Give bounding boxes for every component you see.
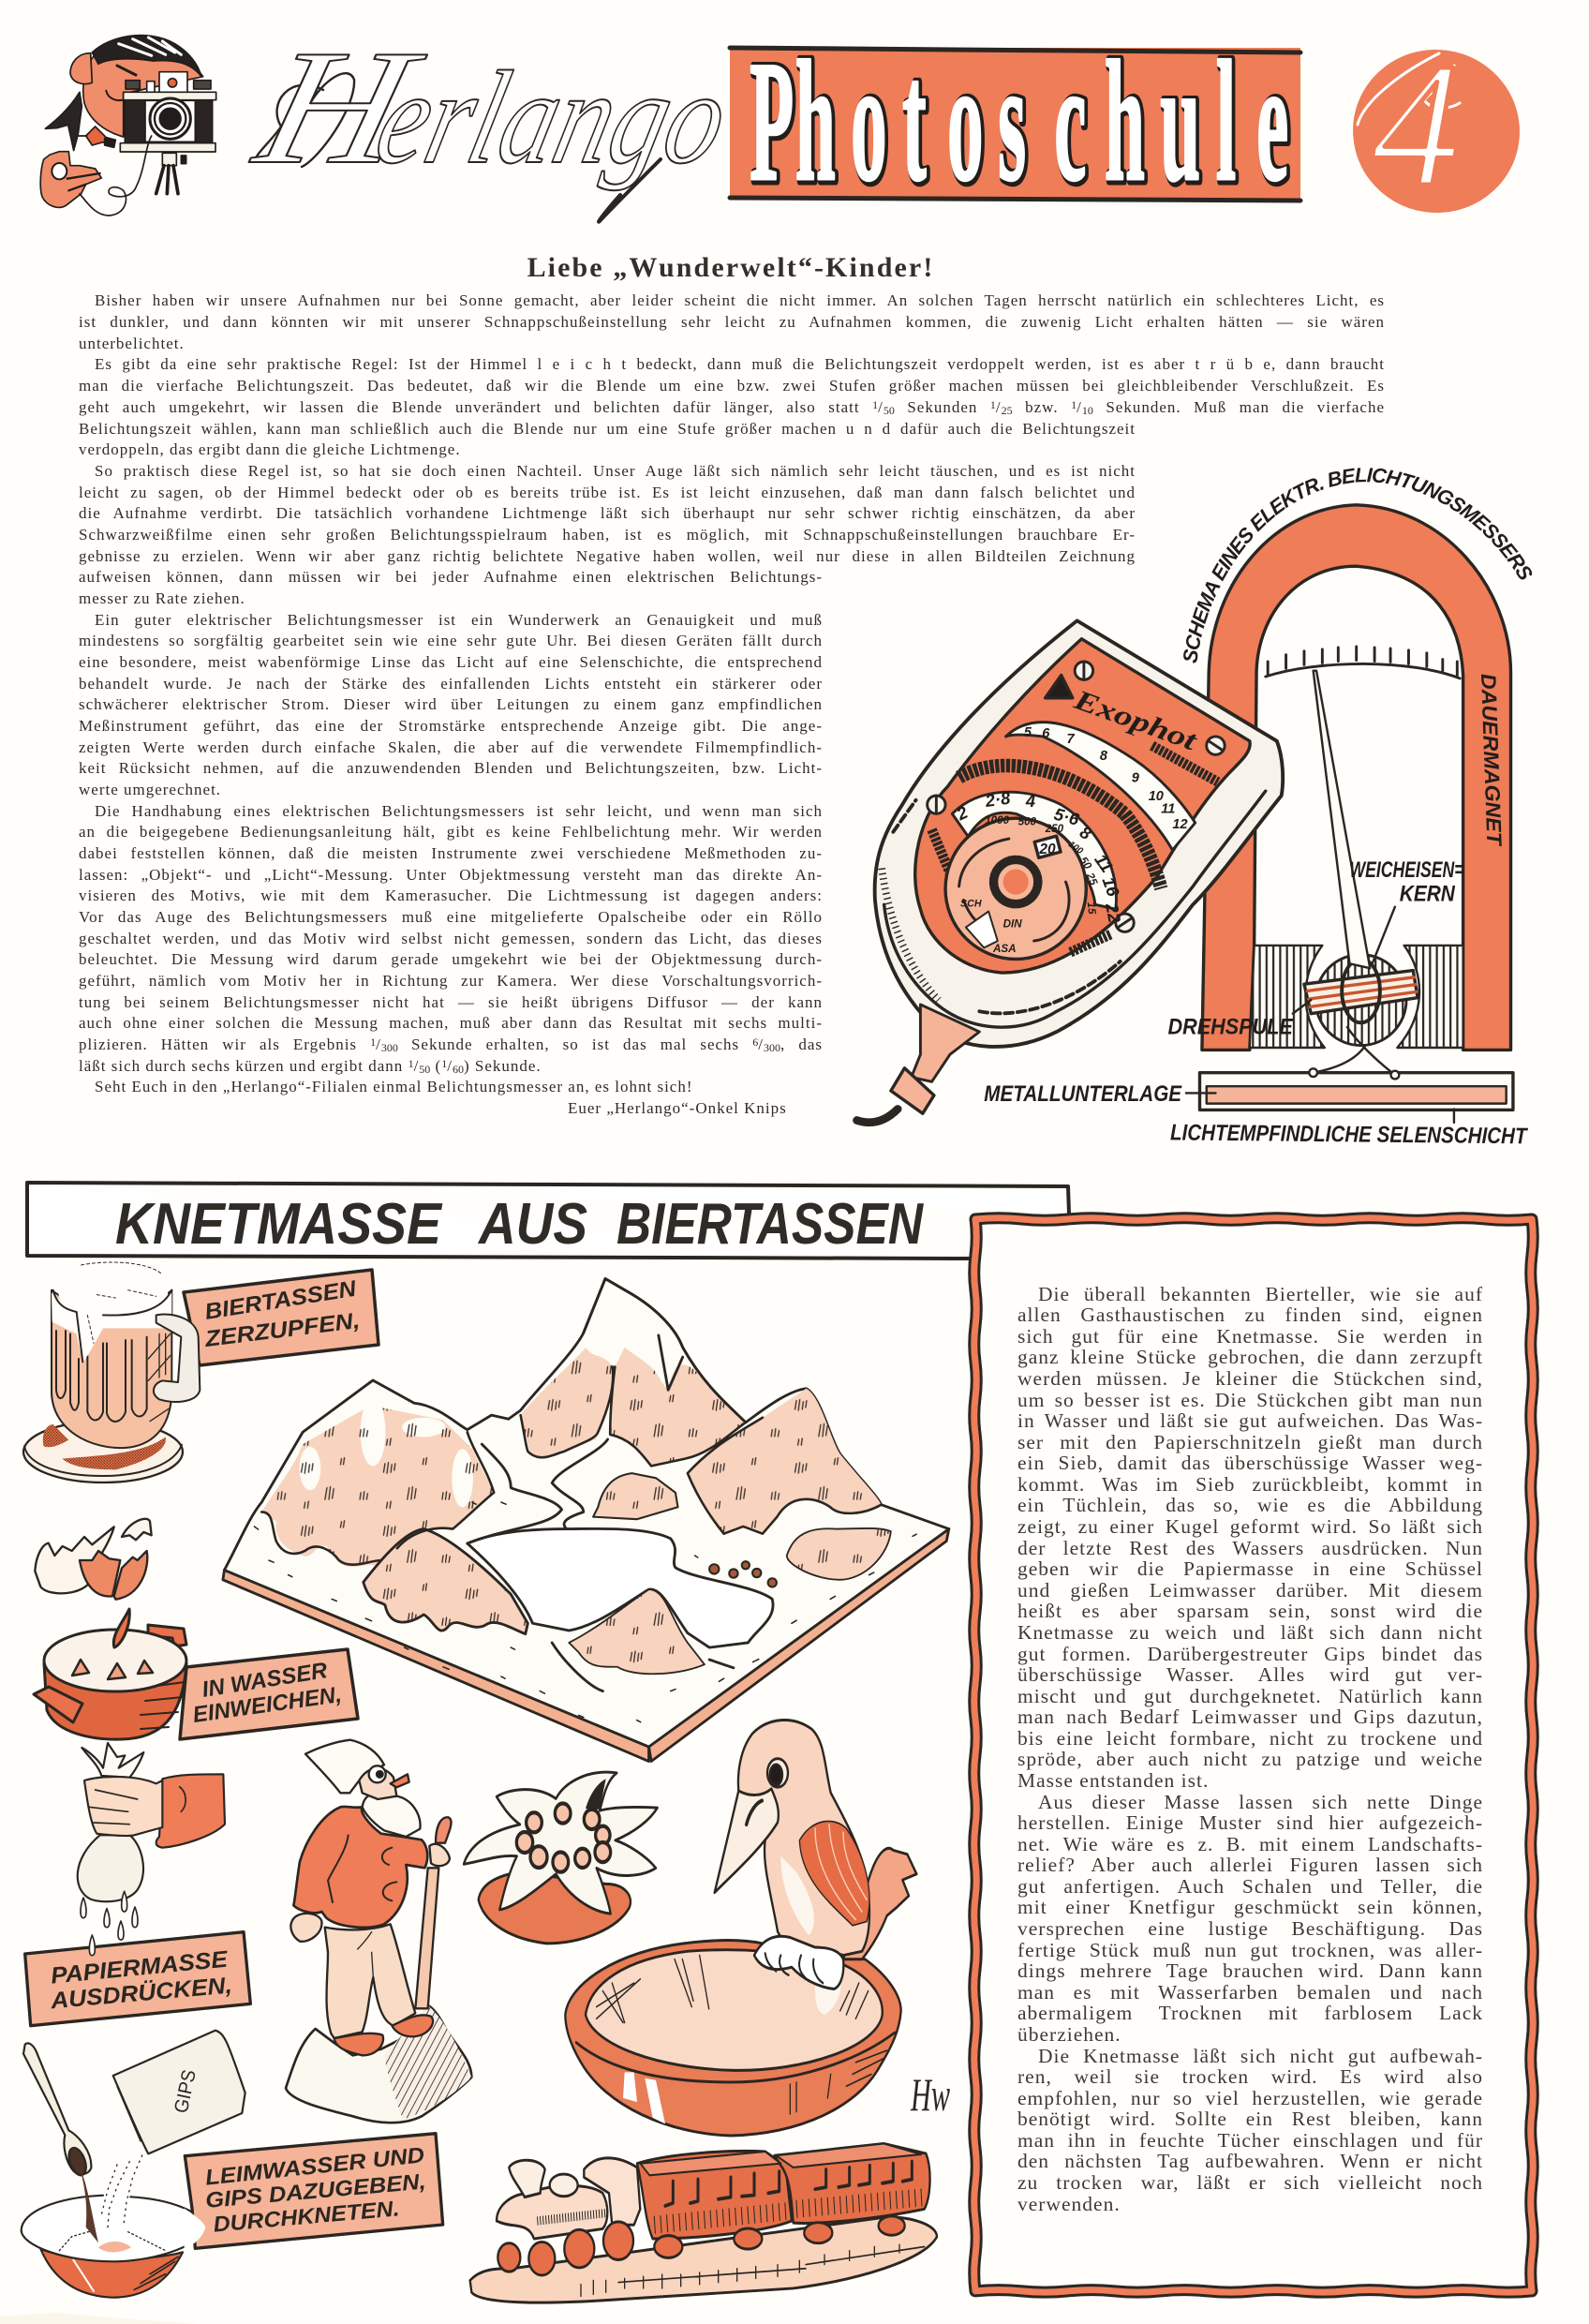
meter numbers and brand: 50 xyxy=(1077,855,1094,872)
hands xyxy=(290,1914,321,1942)
meter numbers and brand: ASA xyxy=(992,943,1016,955)
board surface xyxy=(224,1278,949,1747)
title: greeting: Liebe „Wunderwelt“-Kinder! xyxy=(527,252,934,283)
text block: full-width intro xyxy=(79,291,1385,417)
text block: Knetmasse instructions: verwenden. xyxy=(1017,2193,1121,2215)
text block: Knetmasse instructions: den nächsten Tag aufbewahren. Wenn er nicht xyxy=(1017,2150,1483,2172)
text block: full-width intro: geht auch umgekehrt, wir lassen die Blende unverändert und belichten dafür länger, also statt 1/50 Sekunden 1/25 bzw. 1/10 Sekunden. Muß man die vierfache xyxy=(79,398,1385,417)
logo script: Herlango: erlango xyxy=(364,45,742,192)
diagram labels: KERN xyxy=(1400,881,1455,906)
rock xyxy=(286,2005,471,2123)
label: Papiermasse ausdrücken xyxy=(25,1932,250,2026)
label: Leimwasser und Gips dazugeben: DURCHKNETEN. xyxy=(213,2196,400,2237)
label: Leimwasser und Gips dazugeben xyxy=(185,2134,443,2250)
carriages xyxy=(637,2151,792,2239)
meter numbers and brand: 7 xyxy=(1066,732,1075,747)
text block: middle-width paragraphs: So praktisch diese Regel ist, so hat sie doch einen Nachteil. Unser Auge läßt sich nämlich sehr leicht täuschen, und es ist nicht xyxy=(95,462,1136,480)
text block: Knetmasse instructions: allen Gasthaustischen zu finden sind, eignen xyxy=(1017,1304,1483,1326)
text block: narrow column: schwächerer elektrischer Strom. Dieser wird über Leitungen zu einem ganz empfindlichen xyxy=(79,695,823,713)
text block: Knetmasse instructions: man nach Bedarf Leimwasser und Gips dazutun, xyxy=(1017,1706,1483,1728)
text block: narrow column: Meßinstrument geführt, das eine der Stromstärke entsprechende Anzeige gibt. Die ange- xyxy=(79,717,823,735)
panel: wavy text frame xyxy=(974,1218,1533,2292)
diagram labels xyxy=(984,468,1533,1149)
text block: narrow column: Ein guter elektrischer Belichtungsmesser ist ein Wunderwerk an Genauigkeit und muß xyxy=(95,611,823,629)
lake xyxy=(468,1528,773,1647)
text block: Knetmasse instructions: ganz kleine Stücke gebrochen, die dann zerzupft xyxy=(1017,1346,1483,1368)
meter numbers and brand: 9 xyxy=(1132,770,1140,785)
text block: narrow column: keit Rücksicht nehmen, auf die anzuwendenden Blenden und Belichtungszeiten, bzw. Licht- xyxy=(79,759,823,777)
diagram labels: LICHTEMPFINDLICHE SELENSCHICHT xyxy=(1170,1120,1529,1149)
text block: Knetmasse instructions: mischt und gut durchgeknetet. Natürlich kann xyxy=(1017,1685,1483,1707)
label: Papiermasse ausdrücken: AUSDRÜCKEN, xyxy=(49,1974,233,2014)
meter numbers and brand: 2·8 xyxy=(983,787,1012,811)
text block: full-width intro: ist dunkler, und dann könnten wir mit unserer Schnappschußeinstellung sehr leicht zu Aufnahmen kommen, die zuwenig Licht erhalten hätten — sie wären xyxy=(79,313,1385,331)
text block: Knetmasse instructions: dings mehrere Tage brauchen wird. Dann kann xyxy=(1017,1959,1483,1982)
diagram labels: SCHEMA EINES ELEKTR. BELICHTUNGSMESSERS xyxy=(1183,468,1533,663)
logo script: Herlango: H xyxy=(240,17,438,198)
text block: Knetmasse instructions: zeigt, zu einer Kugel geformt wird. So läßt sich xyxy=(1017,1515,1483,1538)
wheels xyxy=(497,2216,905,2275)
text block: narrow column: lassen: „Objekt“- und „Licht“-Messung. Unter Objektmessung versteht man das direkte An- xyxy=(79,866,823,884)
base plate xyxy=(1199,1073,1513,1110)
text block: narrow column: geschaltet werden, und das Motiv wird selbst nicht gemessen, sondern das Licht, das dieses xyxy=(79,930,823,947)
coaster xyxy=(23,1422,183,1482)
text block: full-width intro: Bisher haben wir unsere Aufnahmen nur bei Sonne gemacht, aber leider scheint die nicht immer. An solchen Tagen herrscht natürlich ein schlechteres Licht, es xyxy=(95,291,1385,309)
device faceplate xyxy=(915,639,1250,973)
text block: Knetmasse instructions: man es mit Wasserfarben bemalen und nach xyxy=(1017,1981,1483,2004)
label: Biertassen zerzupfen xyxy=(184,1270,379,1365)
text block: Knetmasse instructions: gut formen. Darübergestreuter Gips bindet das xyxy=(1017,1643,1483,1665)
meter numbers and brand: 12 xyxy=(1172,817,1188,832)
text block: Knetmasse instructions: heißt es aber sparsam sein, sonst wird die xyxy=(1017,1600,1483,1622)
text block: narrow column: aufweisen können, dann müssen wir bei jeder Aufnahme einen elektrischen Belichtungs- xyxy=(79,568,823,586)
surface speckles xyxy=(254,1502,916,1722)
river xyxy=(468,1439,734,1691)
meter numbers and brand: SCH xyxy=(960,899,982,910)
text block: Knetmasse instructions: und gießen Leimwasser darüber. Mit diesem xyxy=(1017,1579,1483,1601)
text block: narrow column xyxy=(79,568,823,1117)
icon: toy train xyxy=(470,2144,937,2302)
meter numbers and brand: 15 xyxy=(1085,901,1098,916)
beard xyxy=(363,1794,421,1837)
text block: narrow column: Euer „Herlango“-Onkel Knips xyxy=(568,1099,787,1117)
text block: Knetmasse instructions: zu trocken war, läßt er sich vielleicht noch xyxy=(1017,2171,1483,2194)
label: Biertassen zerzupfen: BIERTASSEN xyxy=(203,1276,359,1325)
hand xyxy=(40,152,101,207)
label: in Wasser einweichen: IN WASSER xyxy=(200,1658,330,1703)
text block: Knetmasse instructions: mit einer Knetfigur geschmückt sein können, xyxy=(1017,1896,1483,1918)
label: Leimwasser und Gips dazugeben: GIPS DAZUGEBEN, xyxy=(204,2169,427,2212)
text block: Knetmasse instructions: versprechen eine lustige Beschäftigung. Das xyxy=(1017,1917,1483,1940)
mountains xyxy=(261,1348,881,1567)
text block: middle-width paragraphs: leicht zu sagen, ob der Himmel bedeckt oder ob es bereits trübe ist. Es ist leicht einzusehen, daß man dann falsch belichtet und xyxy=(79,484,1136,501)
text block: Knetmasse instructions: ser mit den Papierschnitzeln gießt man durch xyxy=(1017,1431,1483,1453)
text block: middle-width paragraphs: gebnisse zu erzielen. Wenn wir aber ganz richtig belichtete Negative haben wollen, weil nur diese in allen Bildteilen Zeichnung xyxy=(79,547,1136,565)
text block: narrow column: plizieren. Hätten wir als Ergebnis 1/300 Sekunde erhalten, so ist das mal sechs 6/300, das xyxy=(79,1035,823,1054)
text block: Knetmasse instructions: sich gut für eine Knetmasse. Sie werden in xyxy=(1017,1325,1483,1348)
mug handle xyxy=(154,1315,200,1402)
meter numbers and brand: 25 xyxy=(1083,871,1100,887)
base xyxy=(470,2217,937,2302)
heading box: Knetmasse aus Biertassen: BIERTASSEN xyxy=(616,1192,924,1257)
icon: Gips bag: GIPS xyxy=(171,2068,200,2115)
text block: Knetmasse instructions: geben wir die Papiermasse in eine Schüssel xyxy=(1017,1557,1483,1580)
text block: Knetmasse instructions: empfohlen, nur so viel herzustellen, wie gerade xyxy=(1017,2087,1483,2109)
badge: issue number 4: 4 xyxy=(1372,27,1461,224)
water drops xyxy=(81,1891,138,1940)
meter numbers and brand: 8 xyxy=(1077,822,1095,844)
meter numbers and brand: 8 xyxy=(1100,749,1108,764)
text block: Knetmasse instructions: um so besser ist es. Die Stückchen gibt man nun xyxy=(1017,1389,1483,1411)
meter numbers and brand: 10 xyxy=(1149,789,1164,804)
strap xyxy=(912,1005,979,1081)
text block: Knetmasse instructions: benötigt wird. Sollte ein Rest bleiben, kann xyxy=(1017,2108,1483,2130)
text block: Knetmasse instructions: Die Knetmasse läßt sich nicht gut aufbewah- xyxy=(1038,2045,1483,2067)
meter numbers and brand: 20 xyxy=(1038,842,1056,857)
board edges xyxy=(223,1570,649,1762)
horseshoe magnet xyxy=(1202,505,1511,1050)
label: Leimwasser und Gips dazugeben: LEIMWASSER UND xyxy=(204,2142,425,2190)
text block: narrow column: mindestens so sorgfältig gearbeitet sein wie eine sehr gute Uhr. Bei diesen Geräten fällt durch xyxy=(79,632,823,649)
label: in Wasser einweichen: EINWEICHEN, xyxy=(191,1682,343,1728)
bow tie xyxy=(86,127,115,147)
banner: Photoschule: Photoschule xyxy=(751,26,1290,217)
hat xyxy=(305,1740,384,1793)
text block: Knetmasse instructions: fertige Stück muß nun gut trocknen, was aller- xyxy=(1017,1939,1483,1961)
heading box: Knetmasse aus Biertassen xyxy=(27,1183,1069,1259)
text block: narrow column: an die beigegebene Bedienungsanleitung hält, gibt es keine Fehlbelichtung mehr. Wir werden xyxy=(79,823,823,841)
meter numbers and brand xyxy=(953,683,1203,955)
text block: narrow column: auch ohne einer solchen die Messung machen, muß aber dann das Resultat mit sechs multi- xyxy=(79,1014,823,1032)
text block: Knetmasse instructions: gut anfertigen. Auch Schalen und Teller, die xyxy=(1017,1875,1483,1898)
text block: full-width intro: man die vierfache Belichtungszeit. Das bedeutet, daß wir die Blende um eine bzw. zwei Stufen größer machen müssen bei gleichbleibender Verschlußzeit. Es xyxy=(79,377,1385,395)
mug xyxy=(52,1290,171,1448)
icon: egg shell pieces xyxy=(35,1519,152,1600)
text block: Knetmasse instructions: abermaligem Trocknen mit farblosem Lack xyxy=(1017,2002,1483,2024)
text block: Knetmasse instructions xyxy=(1017,1283,1483,2215)
text block: Knetmasse instructions: ein Tüchlein, das so, wie es die Abbildung xyxy=(1017,1494,1483,1516)
text block: full-width intro: Es gibt da eine sehr praktische Regel: Ist der Himmel l e i c h t bedeckt, dann muß die Belichtungszeit verdoppelt werden, ist es aber t r ü b e, dann braucht xyxy=(95,355,1385,373)
core and coil xyxy=(1315,955,1406,1046)
screws xyxy=(928,662,1225,931)
text block: narrow column: zeigten Werte werden durch einfache Skalen, die aber auf die verwendete Filmempfindlich- xyxy=(79,738,823,756)
text block: narrow column: läßt sich durch sechs kürzen und ergibt dann 1/50 (1/60) Sekunde. xyxy=(79,1057,542,1076)
text block: narrow column: visieren des Motivs, wie mit dem Kamerasucher. Die Lichtmessung ist dagegen anders: xyxy=(79,886,823,904)
text block: middle-width paragraphs: verdoppeln, das ergibt dann die gleiche Lichtmenge. xyxy=(79,440,461,458)
pole shoes xyxy=(1250,946,1463,1048)
text block: narrow column: tung bei seinem Belichtungsmesser nicht hat — sie heißt übrigens Diffusor — der kann xyxy=(79,993,823,1011)
text block: Knetmasse instructions: Die überall bekannten Bierteller, wie sie auf xyxy=(1038,1283,1483,1305)
tripod xyxy=(162,153,176,166)
heading box: Knetmasse aus Biertassen: KNETMASSE xyxy=(115,1192,442,1257)
mountain lower edges xyxy=(261,1366,881,1565)
meter numbers and brand: 6 xyxy=(1042,726,1050,741)
label: Papiermasse ausdrücken: PAPIERMASSE xyxy=(50,1946,230,1989)
banner: Photoschule: Photoschule xyxy=(750,25,1288,216)
icon: beer mug on coaster xyxy=(23,1262,200,1482)
text block: middle-width paragraphs xyxy=(79,420,1136,565)
signature mark: Hw xyxy=(910,2068,950,2121)
shoes xyxy=(334,2015,433,2055)
staff xyxy=(415,1868,438,2008)
diagram labels: DREHSPULE xyxy=(1168,1014,1294,1039)
text block: Knetmasse instructions: kommt. Was im Sieb zurückbleibt, kommt in xyxy=(1017,1473,1483,1496)
text block: narrow column: eine besondere, meist wabenförmige Linse das Licht auf eine Selenschichte, die entsprechend xyxy=(79,653,823,671)
text block: middle-width paragraphs: Belichtungszeit wählen, kann man schließlich auch die Blende nur um eine Stufe größer machen u n d dafür auch die Belichtungszeit xyxy=(79,420,1136,437)
meter numbers and brand: 16 xyxy=(1099,874,1124,900)
text block: narrow column: geführt, nämlich vom Motiv her in Richtung zur Kamera. Wer diese Vorschaltungsvorrich- xyxy=(79,972,823,990)
badge: issue number 4 xyxy=(1343,27,1530,224)
text block: Knetmasse instructions: relief? Aber auch allerlei Figuren lassen sich xyxy=(1017,1854,1483,1876)
icon: gnome figure on rock xyxy=(286,1740,471,2123)
text block: narrow column: behandelt wurde. Je nach der Stärke des einfallenden Lichts entsteht ein stärkerer oder xyxy=(79,675,823,693)
text block: full-width intro: unterbelichtet. xyxy=(79,335,185,352)
relief model: landscape board xyxy=(223,1278,949,1762)
village xyxy=(709,1561,777,1587)
ear xyxy=(70,53,92,84)
meter numbers and brand: 11 xyxy=(1091,850,1117,876)
hair top xyxy=(92,36,201,77)
icon: edelweiss flower sculpture xyxy=(464,1772,658,1944)
foam xyxy=(56,1263,168,1362)
text block: middle-width paragraphs: Schwarzweißfilme einen sehr großen Belichtungsspielraum haben, ist es möglich, mit Schnappschußeinstellungen brauchbare Er- xyxy=(79,526,1136,544)
meter numbers and brand: 4 xyxy=(1025,791,1035,811)
meter numbers and brand: 5·6 xyxy=(1052,804,1082,829)
label: Biertassen zerzupfen: ZERZUPFEN, xyxy=(202,1308,361,1352)
text block: Knetmasse instructions: spröde, aber auch nicht zu patzige und weiche xyxy=(1017,1748,1483,1770)
icon: Gips bag xyxy=(113,2031,245,2153)
text block: narrow column: Vor das Auge des Belichtungsmessers muß eine mitgelieferte Opalscheibe oder ein Röllo xyxy=(79,908,823,926)
text block: Knetmasse instructions: Knetmasse zu weich und läßt sich dann nicht xyxy=(1017,1621,1483,1644)
camera xyxy=(126,81,211,89)
diagram labels: WEICHEISEN= xyxy=(1349,857,1464,883)
text block: narrow column: Die Handhabung eines elektrischen Belichtungsmessers ist sehr leicht, und wenn man sich xyxy=(95,802,823,820)
lower scale xyxy=(952,792,1116,909)
text block: Knetmasse instructions: herstellen. Einige Muster sind hier aufgezeich- xyxy=(1017,1811,1483,1834)
meter numbers and brand: 250 xyxy=(1045,823,1064,835)
locomotive xyxy=(497,2185,607,2239)
text block: Knetmasse instructions: net. Wie wäre es z. B. mit einem Landschafts- xyxy=(1017,1833,1483,1855)
text block: Knetmasse instructions: ren, weil sie trocken wird. Es wird also xyxy=(1017,2065,1483,2088)
snow peak edge xyxy=(584,1278,746,1423)
dial xyxy=(945,818,1086,959)
text block: narrow column: Seht Euch in den „Herlango“-Filialen einmal Belichtungsmesser an, es lohnt sich! xyxy=(95,1078,693,1095)
icon: bowl with spoon and glue water xyxy=(22,2043,205,2298)
text block: Knetmasse instructions: Masse entstanden ist. xyxy=(1017,1769,1209,1792)
text block: narrow column: messer zu Rate ziehen. xyxy=(79,589,245,607)
text block: Knetmasse instructions: überschüssige Wasser. Alles wird gut ver- xyxy=(1017,1663,1483,1686)
text block: Knetmasse instructions: ein Sieb, damit das überschüssige Wasser weg- xyxy=(1017,1452,1483,1474)
pigtail hair xyxy=(45,92,82,151)
meter numbers and brand: 5 xyxy=(1024,725,1032,740)
eyebrow and smile xyxy=(117,66,136,75)
meter numbers and brand: 100 xyxy=(1066,840,1085,857)
meter numbers and brand: 11 xyxy=(1161,801,1175,816)
jacket xyxy=(293,1807,427,1928)
diagram labels: METALLUNTERLAGE xyxy=(984,1081,1182,1107)
diagram labels: DAUERMAGNET xyxy=(1477,673,1506,848)
label: in Wasser einweichen xyxy=(180,1649,358,1739)
text block: narrow column: beleuchtet. Die Messung wird darum gerade umgekehrt wie bei der Objektmessung durch- xyxy=(79,950,823,968)
meter numbers and brand: 500 xyxy=(1018,815,1037,827)
text block: narrow column: werte umgerechnet. xyxy=(79,781,221,798)
shutter cable xyxy=(80,136,152,216)
meter numbers and brand: 22 xyxy=(1102,901,1125,925)
text block: Knetmasse instructions: Aus dieser Masse lassen sich nette Dinge xyxy=(1038,1791,1483,1813)
icon: bowl xyxy=(565,1940,901,2136)
heading box: Knetmasse aus Biertassen: AUS xyxy=(477,1192,587,1257)
text block: Knetmasse instructions: in Wasser und läßt sie gut aufweichen. Das Was- xyxy=(1017,1409,1483,1432)
face xyxy=(83,52,203,137)
text block: Knetmasse instructions: werden müssen. Je kleiner die Stückchen sind, xyxy=(1017,1367,1483,1390)
icon: bird on bowl rim xyxy=(715,1720,916,1989)
text block: Knetmasse instructions: bis eine leicht formbare, nicht zu trockene und xyxy=(1017,1727,1483,1750)
icon: pot with water xyxy=(34,1609,186,1739)
meter numbers and brand: DIN xyxy=(1003,918,1022,931)
pointer and scale xyxy=(1314,671,1370,968)
icon: mascot with camera xyxy=(40,36,216,216)
dark scribbles xyxy=(959,766,1161,888)
text block: Knetmasse instructions: überziehen. xyxy=(1017,2023,1121,2046)
meter numbers and brand: 1000 xyxy=(985,814,1010,827)
icon: hand squeezing cloth xyxy=(78,1743,225,1940)
text block: Knetmasse instructions: man ihn in feuchte Tücher einschlagen und für xyxy=(1017,2129,1483,2152)
text block: middle-width paragraphs: die Aufnahme verdirbt. Die tatsächlich vorhandene Lichtmenge läßt sich überhaupt nur sehr schwer richtig einschätzen, da aber xyxy=(79,504,1136,522)
upper scale xyxy=(1006,723,1195,850)
meter numbers and brand: Exophot xyxy=(1069,683,1203,757)
trousers xyxy=(325,1924,415,2038)
text block: Knetmasse instructions: der letzte Rest des Wassers ausdrücken. Nun xyxy=(1017,1537,1483,1559)
face xyxy=(359,1768,396,1799)
text block: narrow column: dabei feststellen können, daß die meisten Instrumente zwei verschiedene Meßmethoden zu- xyxy=(79,844,823,862)
logo script: Herlango xyxy=(240,17,750,222)
meter numbers and brand: 2 xyxy=(953,802,972,825)
device case xyxy=(875,620,1283,1047)
diagram: Belichtungsmesser schema xyxy=(853,468,1533,1149)
